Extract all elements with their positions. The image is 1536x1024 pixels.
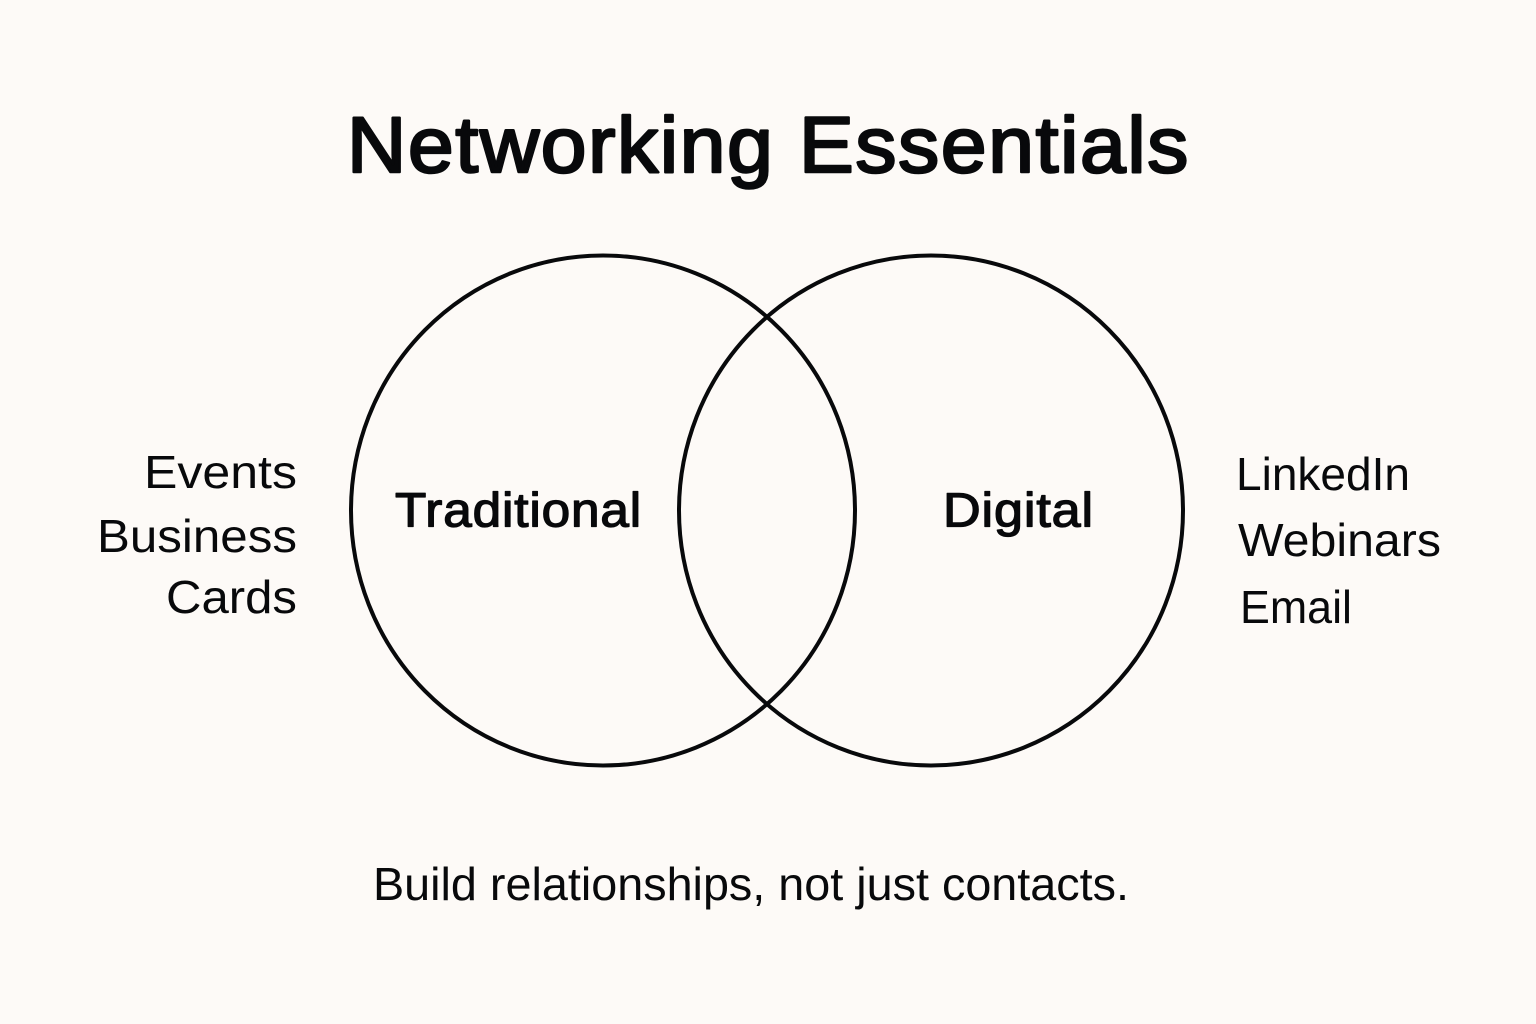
tagline: Build relationships, not just contacts.	[373, 858, 1129, 910]
digital items: Email	[1240, 581, 1352, 633]
digital items: Webinars	[1238, 514, 1441, 566]
traditional items: Cards	[166, 571, 297, 623]
digital items: LinkedIn	[1236, 448, 1410, 500]
venn diagram	[351, 256, 1183, 766]
traditional items	[97, 446, 297, 623]
digital items	[1236, 448, 1441, 633]
title: Networking Essentials	[347, 100, 1190, 189]
label: traditional: Traditional	[395, 484, 642, 538]
traditional items: Business	[97, 510, 297, 562]
traditional items: Events	[144, 446, 297, 498]
circle: traditional	[351, 256, 855, 766]
label: digital: Digital	[943, 484, 1094, 538]
circle: digital	[679, 256, 1183, 766]
